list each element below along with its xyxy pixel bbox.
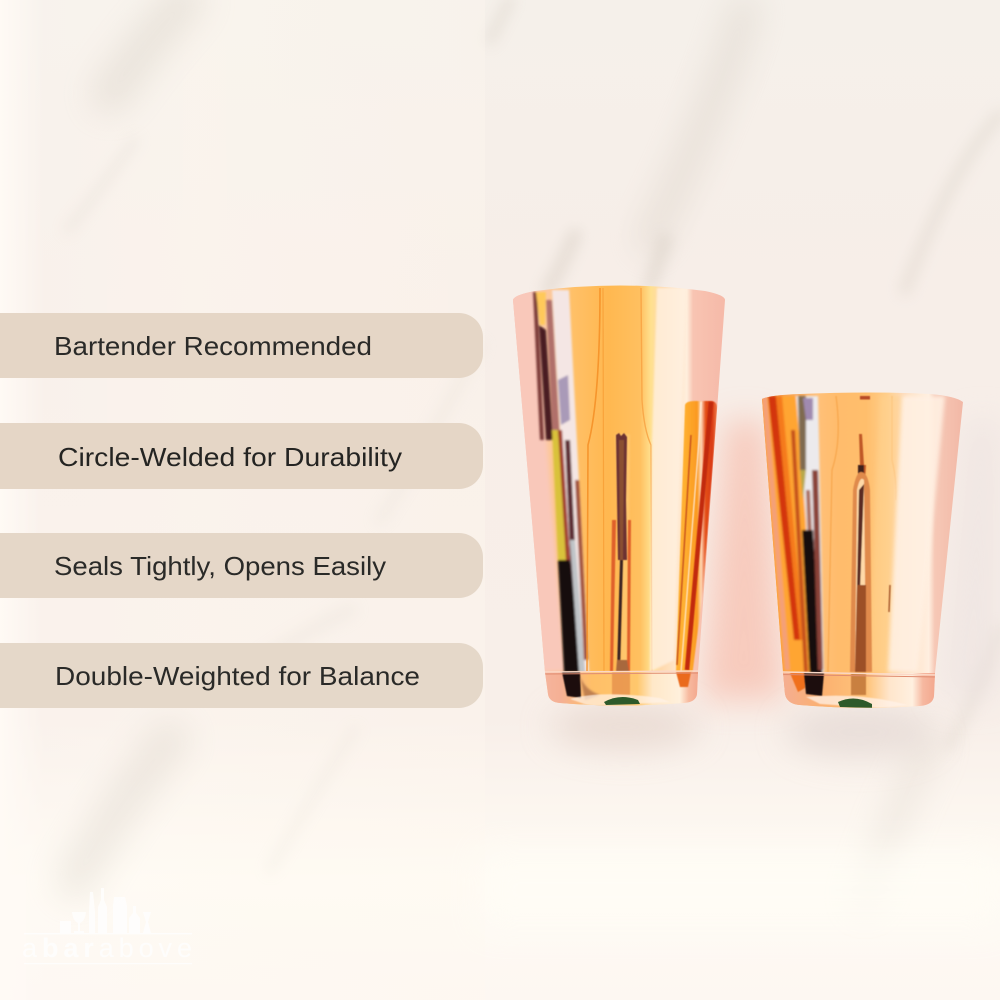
pill: Seals Tightly, Opens Easily (0, 533, 483, 598)
pill: Bartender Recommended (0, 313, 483, 378)
pill: Seals Tightly, Opens Easily: Seals Tightly, Opens Easily (54, 551, 386, 581)
large copper shaker tin (513, 286, 725, 706)
pill: Circle-Welded for Durability: Circle-Welded for Durability (58, 442, 402, 472)
left reflections (762, 394, 826, 672)
icon: bar bottles silhouette (60, 888, 151, 933)
cup shadows (550, 420, 1000, 758)
left mirror reflections (533, 290, 589, 672)
inner tin reflection (676, 401, 717, 688)
central reflections (828, 396, 896, 672)
pill: Circle-Welded for Durability (0, 423, 483, 489)
pill: Double-Weighted for Balance (0, 643, 483, 708)
left pink wall (513, 292, 565, 672)
base band (545, 670, 698, 706)
small copper shaker tin (755, 388, 970, 713)
base band (783, 671, 935, 708)
logo wordmark: abarabove (22, 933, 192, 963)
pill: Double-Weighted for Balance: Double-Weighted for Balance (55, 661, 420, 691)
orange seam lines and central reflection (587, 288, 652, 672)
logo: a bar above (22, 888, 192, 964)
pill: Bartender Recommended: Bartender Recommended (54, 331, 372, 361)
